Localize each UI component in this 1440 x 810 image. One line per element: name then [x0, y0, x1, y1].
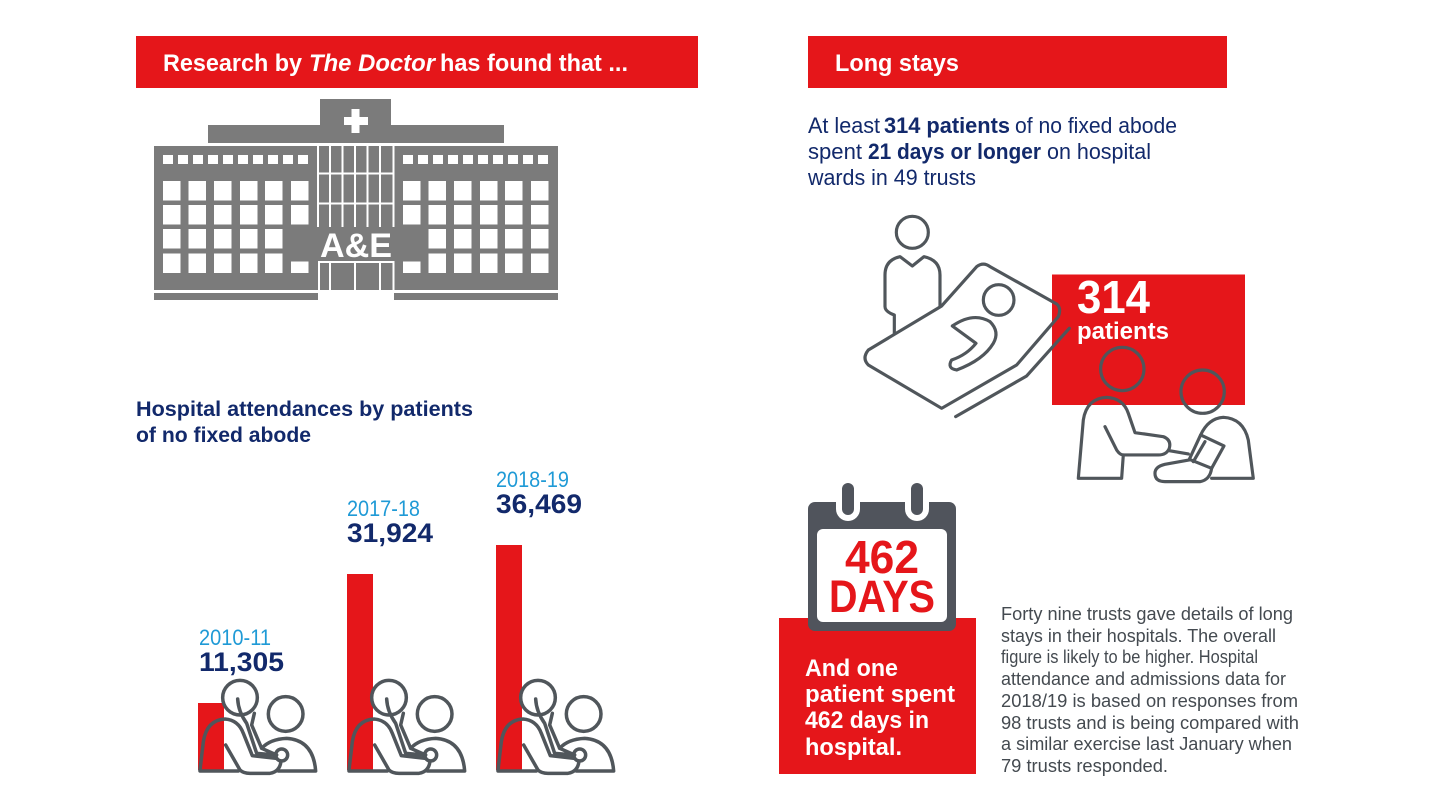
callout: 314 patients: patients	[1077, 318, 1169, 345]
text: methodology note: 2018/19 is based on responses from	[1001, 691, 1298, 711]
bar: 2010-11: 2010-11	[199, 625, 271, 650]
bar chart: attendances	[198, 467, 614, 773]
heading: long stays: Long stays	[835, 50, 959, 77]
icon: doctor and patient 2018-19	[498, 680, 614, 773]
heading: research: The Doctor	[309, 50, 437, 77]
bar: 2010-11	[198, 625, 284, 770]
text: long stays intro: on hospital	[1047, 139, 1151, 164]
text: methodology note: 79 trusts responded.	[1001, 756, 1168, 776]
icon: calendar 462 days: 462	[845, 531, 919, 583]
text: methodology note: attendance and admissions data for	[1001, 669, 1286, 689]
bar: 2010-11: 11,305	[199, 647, 284, 677]
text: methodology note	[1001, 604, 1299, 776]
text: methodology note: Forty nine trusts gave details of long	[1001, 604, 1293, 624]
panel: one patient spent 462 days: 462 days in	[805, 707, 929, 734]
icon: nurse and patient	[1078, 347, 1253, 482]
text: long stays intro: At least	[808, 113, 880, 138]
bar: 2018-19: 36,469	[496, 489, 582, 519]
bar: 2018-19	[496, 467, 582, 770]
heading: research: has found that ...	[440, 50, 628, 77]
text: long stays intro: spent	[808, 139, 862, 164]
icon: calendar 462 days: DAYS	[829, 571, 935, 622]
text: long stays intro: wards in 49 trusts	[807, 165, 976, 190]
icon: doctor and patient 2017-18	[349, 680, 465, 773]
icon: hospital building	[154, 99, 558, 300]
panel: one patient spent 462 days: patient spent	[805, 681, 955, 708]
text: methodology note: 98 trusts and is being compared with	[1001, 713, 1299, 733]
bar: 2017-18	[347, 496, 433, 770]
icon: doctor and patient 2010-11	[200, 680, 316, 773]
bar: 2017-18: 31,924	[347, 518, 433, 548]
chart heading	[136, 398, 473, 447]
icon: hospital building: A&E	[320, 227, 392, 265]
text: long stays intro: 21 days or longer	[868, 139, 1041, 164]
panel: one patient spent 462 days: And one	[805, 655, 898, 682]
icon: calendar 462 days	[808, 478, 956, 631]
callout: 314 patients	[1052, 271, 1245, 405]
bar: 2017-18: 2017-18	[347, 496, 420, 521]
text: long stays intro: of no fixed abode	[1015, 113, 1177, 138]
panel: one patient spent 462 days	[779, 618, 976, 774]
heading: long stays	[808, 36, 1227, 88]
icon: hospital bed with doctor	[865, 216, 1069, 417]
heading: research	[136, 36, 698, 88]
text: long stays intro: 314 patients	[884, 113, 1010, 138]
heading: research: Research by	[163, 50, 303, 77]
chart heading: of no fixed abode	[136, 424, 311, 447]
chart heading: Hospital attendances by patients	[136, 398, 473, 421]
panel: one patient spent 462 days: hospital.	[805, 734, 902, 761]
bar: 2018-19: 2018-19	[496, 467, 569, 492]
text: methodology note: a similar exercise last January when	[1001, 734, 1292, 754]
text: methodology note: figure is likely to be higher. Hospital	[1001, 647, 1258, 667]
callout: 314 patients: 314	[1077, 271, 1150, 323]
text: long stays intro	[807, 113, 1177, 190]
text: methodology note: stays in their hospitals. The overall	[1001, 626, 1276, 646]
